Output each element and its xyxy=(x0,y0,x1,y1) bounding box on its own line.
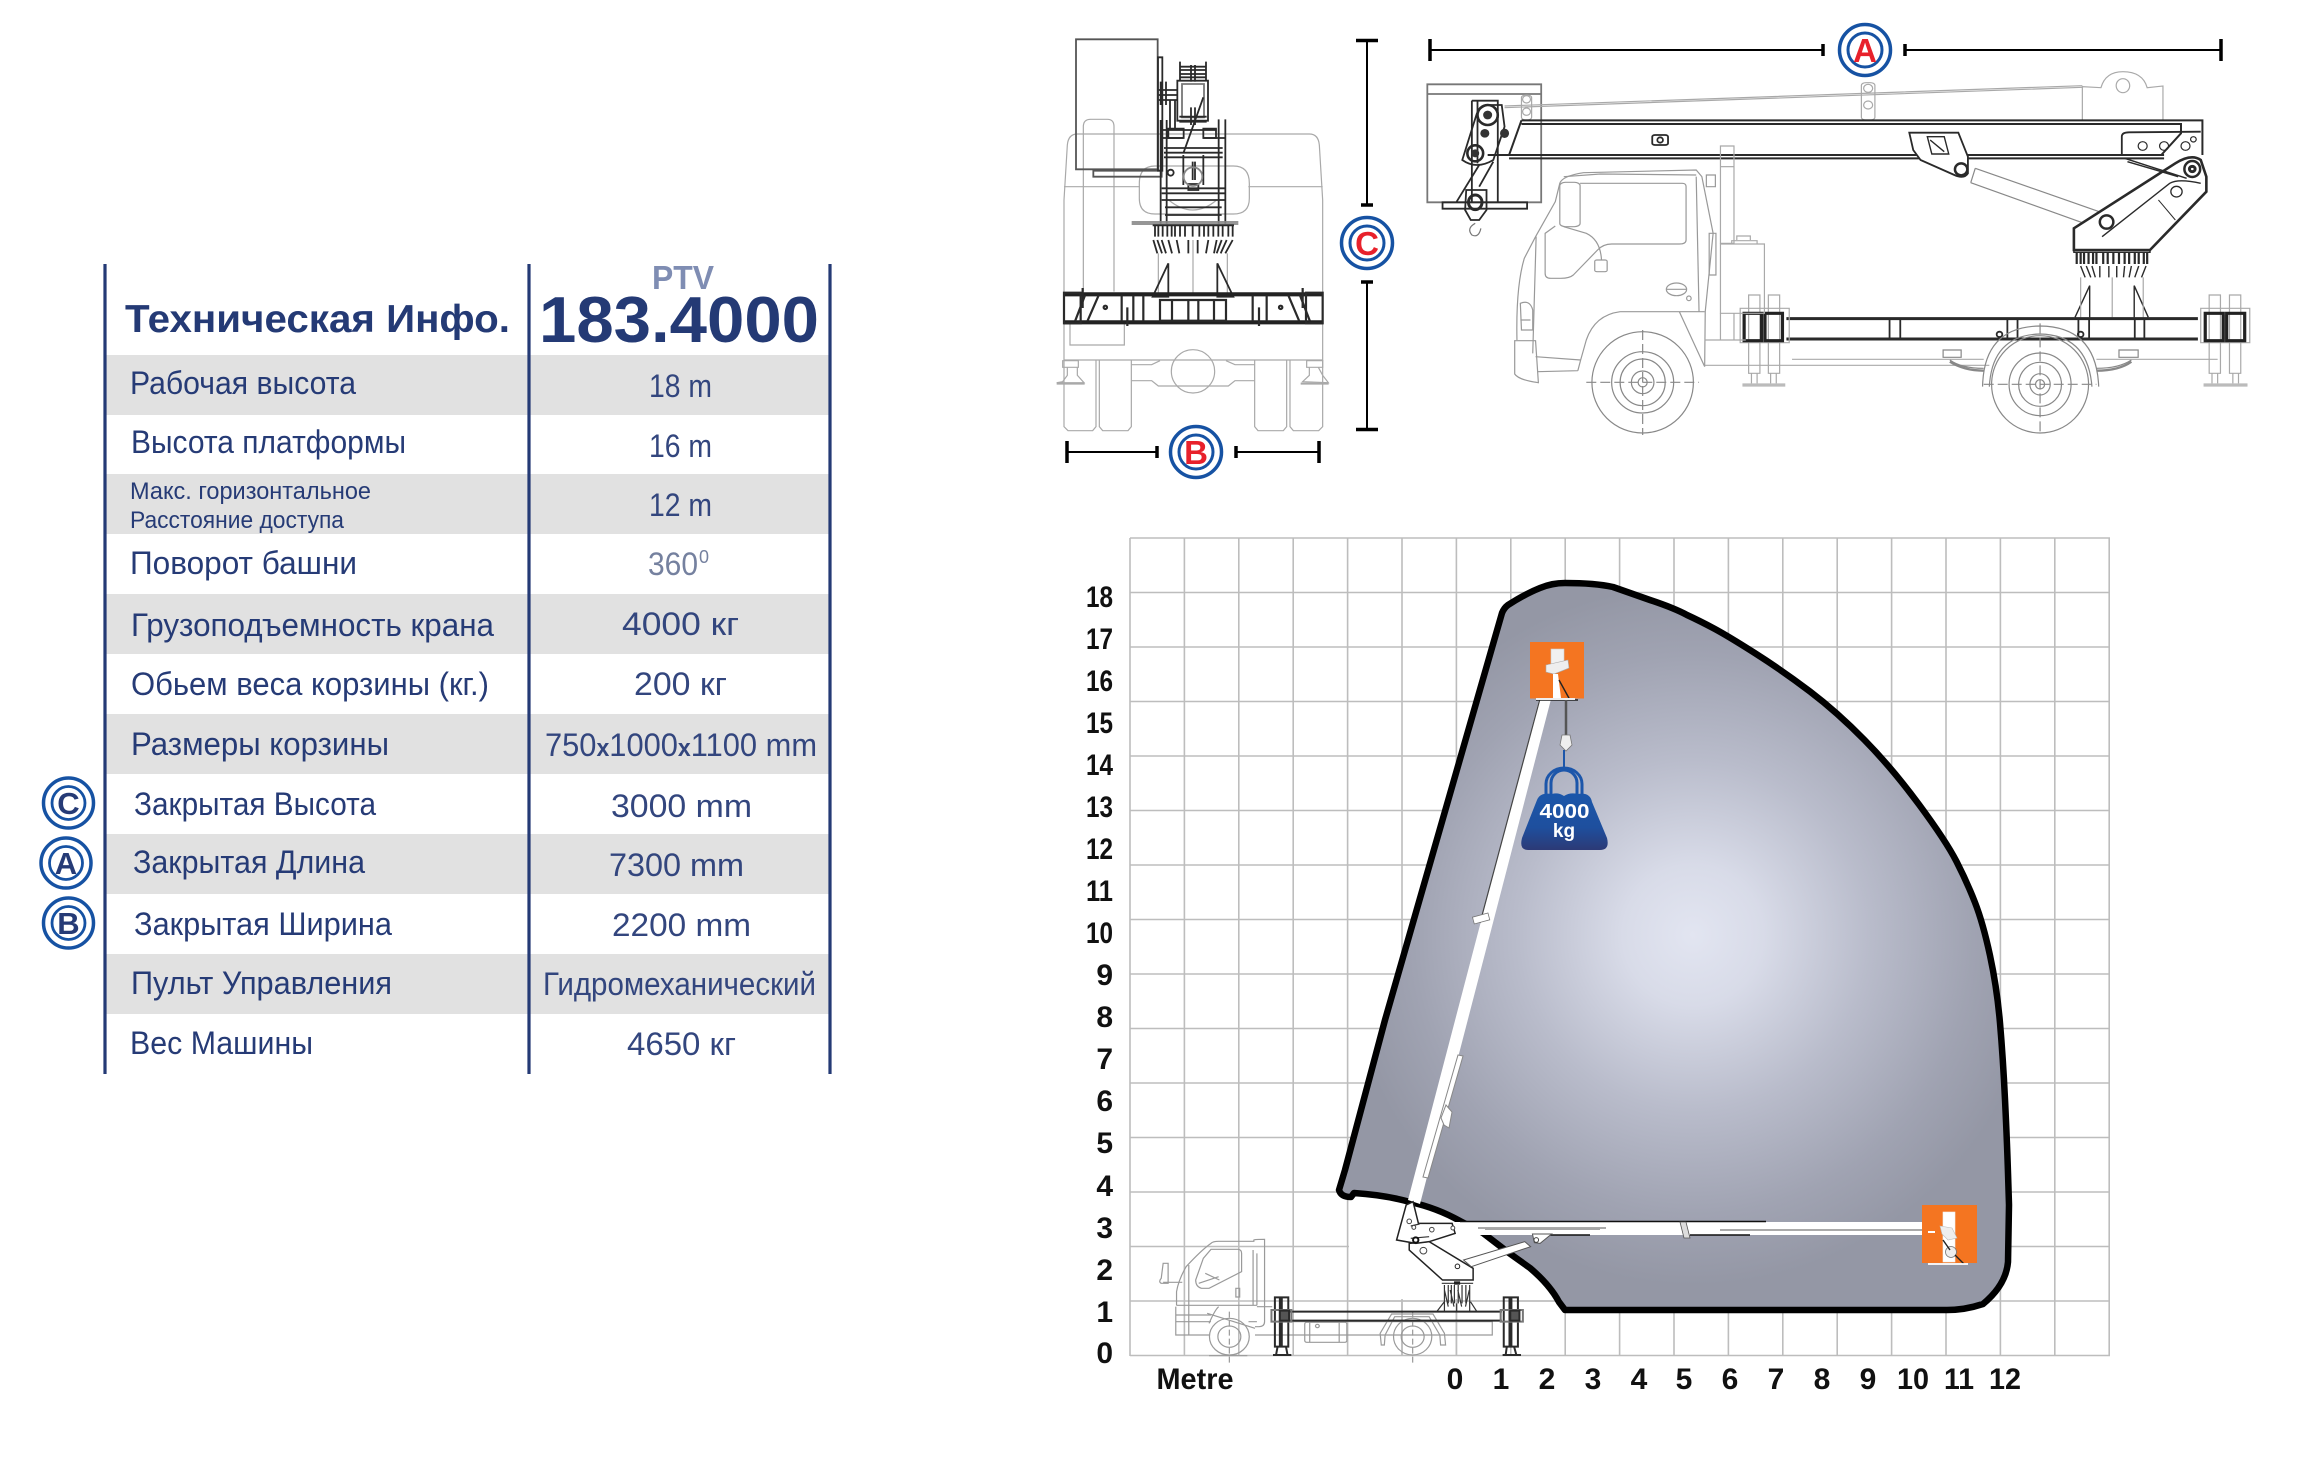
weight icon 4000 kg xyxy=(1521,750,1608,850)
badge A: A xyxy=(1853,32,1877,69)
x axis labels: 4 xyxy=(1631,1363,1648,1396)
model number: 183.4000 xyxy=(539,283,819,356)
badge C: C xyxy=(1355,225,1379,262)
side view drawing of truck xyxy=(1427,72,2250,435)
side view: rear wheel and fender xyxy=(1943,323,2138,433)
side view: boom xyxy=(1488,120,2202,177)
small truck wheels xyxy=(1209,1318,1249,1355)
row: working height: 18 m xyxy=(649,368,712,404)
upper basket marker xyxy=(1530,642,1584,751)
y axis labels: 15 xyxy=(1086,707,1113,740)
upper basket fitting xyxy=(1536,649,1578,700)
x axis labels: 11 xyxy=(1944,1363,1974,1396)
x axis labels: Metre xyxy=(1156,1363,1234,1396)
row: platform height: Высота платформы xyxy=(131,424,406,460)
specification table xyxy=(105,259,830,1074)
y axis labels: 9 xyxy=(1096,959,1113,992)
x axis labels: 7 xyxy=(1768,1363,1784,1396)
row: tower rotation: 360 xyxy=(648,546,698,582)
row: closed height: 3000 mm xyxy=(611,788,752,824)
slew ring xyxy=(1437,1283,1477,1312)
table badge A: A xyxy=(55,846,77,881)
y axis labels: 10 xyxy=(1086,917,1113,950)
row: tower rotation xyxy=(130,545,709,582)
row: basket size: 750x1000x1100 mm xyxy=(545,727,817,763)
working envelope xyxy=(1339,583,2009,1310)
front view drawing of truck xyxy=(1057,39,1329,431)
table badge B: B xyxy=(57,906,80,941)
row: closed length xyxy=(133,844,744,883)
weight icon 4000 kg: kg xyxy=(1553,821,1575,842)
crane base xyxy=(1397,1202,1552,1312)
y axis labels: 12 xyxy=(1086,833,1113,866)
y axis labels: 3 xyxy=(1096,1212,1113,1245)
row: vehicle weight: 4650 кг xyxy=(627,1026,736,1062)
lower basket marker xyxy=(1922,1205,1977,1264)
row: control panel: Гидромеханический xyxy=(543,966,816,1002)
row: max horizontal reach: 12 m xyxy=(649,487,712,523)
dimension C xyxy=(1342,40,1392,430)
x axis labels: 1 xyxy=(1493,1363,1509,1396)
y axis labels: 1 xyxy=(1096,1296,1113,1329)
row: basket capacity: 200 кг xyxy=(634,666,727,702)
badge B xyxy=(1170,426,1222,478)
weight icon 4000 kg: 4000 xyxy=(1540,801,1590,823)
x axis labels: 10 xyxy=(1897,1363,1929,1396)
y axis labels: 6 xyxy=(1096,1085,1113,1118)
dimension A lines xyxy=(1430,39,2221,61)
x axis labels: 6 xyxy=(1722,1363,1738,1396)
dimension A xyxy=(1430,24,2221,76)
dimension B lines xyxy=(1067,441,1319,463)
y axis labels: 4 xyxy=(1096,1170,1113,1203)
row: control panel xyxy=(131,965,816,1002)
front view: cab and wheels xyxy=(1057,119,1329,431)
row: vehicle weight xyxy=(130,1025,736,1062)
row: closed width: Закрытая Ширина xyxy=(134,906,392,942)
table column rules xyxy=(105,264,830,1074)
row: control panel: Пульт Управления xyxy=(131,965,392,1001)
table badge C: C xyxy=(57,786,80,821)
working range chart xyxy=(1086,538,2110,1396)
row: working height xyxy=(130,365,712,404)
side view: front wheel xyxy=(1586,330,1699,435)
row: basket size: Размеры корзины xyxy=(131,726,389,762)
side view: lift arm xyxy=(2074,157,2206,250)
y axis labels: 14 xyxy=(1086,749,1113,782)
row: basket capacity xyxy=(131,666,727,702)
x axis labels: 5 xyxy=(1676,1363,1692,1396)
side view: slew ring xyxy=(2074,250,2150,317)
side view: chassis frame xyxy=(1786,319,2198,339)
heading: technical info: Техническая Инфо. xyxy=(125,298,510,341)
telescopic boom horizontal xyxy=(1418,1222,1940,1238)
row: platform height xyxy=(131,424,712,464)
side view: tie rods and brackets xyxy=(1505,72,2163,120)
front view: slew ring xyxy=(1132,222,1238,297)
row: max horizontal reach: Макс. горизонтальное xyxy=(130,478,371,505)
row: basket size xyxy=(131,726,817,763)
table badge B xyxy=(44,898,94,948)
y axis labels: 7 xyxy=(1096,1043,1113,1076)
side view: mast and tank xyxy=(1705,146,2218,365)
cable and hook xyxy=(1560,700,1572,751)
y axis labels: 0 xyxy=(1096,1337,1113,1370)
y axis labels: 17 xyxy=(1086,623,1113,656)
y axis labels: 16 xyxy=(1086,665,1113,698)
row: closed width: 2200 mm xyxy=(612,907,751,943)
y axis labels: 5 xyxy=(1096,1127,1113,1160)
row: closed width xyxy=(134,906,751,943)
x axis labels xyxy=(1156,1363,2021,1396)
lift cylinder xyxy=(1464,1242,1531,1267)
x axis labels: 2 xyxy=(1539,1363,1555,1396)
row: closed length: 7300 mm xyxy=(609,847,744,883)
row: platform height: 16 m xyxy=(649,428,712,464)
row: vehicle weight: Вес Машины xyxy=(130,1025,313,1061)
x axis labels: 12 xyxy=(1989,1363,2021,1396)
row: closed height xyxy=(134,786,752,824)
model prefix: PTV xyxy=(652,259,714,296)
row: crane capacity xyxy=(131,606,739,643)
row: closed length: Закрытая Длина xyxy=(133,844,365,880)
row: tower rotation: Поворот башни xyxy=(130,545,357,581)
dimension B xyxy=(1067,426,1319,478)
table row shading xyxy=(105,355,830,1014)
x axis labels: 9 xyxy=(1860,1363,1876,1396)
row: tower rotation: 0 xyxy=(699,547,709,567)
lower basket fitting xyxy=(1928,1212,1968,1264)
chart grid xyxy=(1130,538,2110,1356)
x axis labels: 8 xyxy=(1814,1363,1830,1396)
row: max horizontal reach xyxy=(130,478,712,534)
table badge A xyxy=(41,838,91,888)
blank area under envelope xyxy=(1349,1194,1570,1299)
row: closed height: Закрытая Высота xyxy=(134,786,376,822)
row: crane capacity: 4000 кг xyxy=(622,606,739,642)
side view: lift cylinder xyxy=(1971,168,2102,223)
row: max horizontal reach: Расстояние доступа xyxy=(130,507,345,534)
front view: chassis frame xyxy=(1064,288,1323,326)
dimension C lines xyxy=(1356,40,1378,430)
side view: outriggers xyxy=(1740,295,2250,387)
row: crane capacity: Грузоподъемность крана xyxy=(131,607,494,643)
front view: basket xyxy=(1076,39,1162,177)
y axis labels xyxy=(1086,581,1113,1370)
side view: cab xyxy=(1515,170,1716,383)
small truck chassis xyxy=(1289,1312,1502,1321)
small truck cab xyxy=(1160,1239,1492,1363)
front view: boom head xyxy=(1159,62,1225,223)
badge B: B xyxy=(1184,434,1208,471)
y axis labels: 11 xyxy=(1086,875,1113,908)
badge C xyxy=(1342,218,1392,268)
telescopic boom raised xyxy=(1408,673,1556,1204)
y axis labels: 13 xyxy=(1086,791,1113,824)
x axis labels: 3 xyxy=(1585,1363,1601,1396)
table badge C xyxy=(44,778,94,828)
row: basket capacity: Обьем веса корзины (кг.) xyxy=(131,666,489,702)
y axis labels: 2 xyxy=(1096,1254,1113,1287)
side view: basket xyxy=(1427,84,1541,236)
badge A xyxy=(1840,24,1890,76)
small truck xyxy=(1160,1239,1523,1363)
x axis labels: 0 xyxy=(1447,1363,1463,1396)
y axis labels: 18 xyxy=(1086,581,1113,614)
y axis labels: 8 xyxy=(1096,1001,1113,1034)
small truck outriggers xyxy=(1271,1297,1523,1355)
row: working height: Рабочая высота xyxy=(130,365,356,401)
